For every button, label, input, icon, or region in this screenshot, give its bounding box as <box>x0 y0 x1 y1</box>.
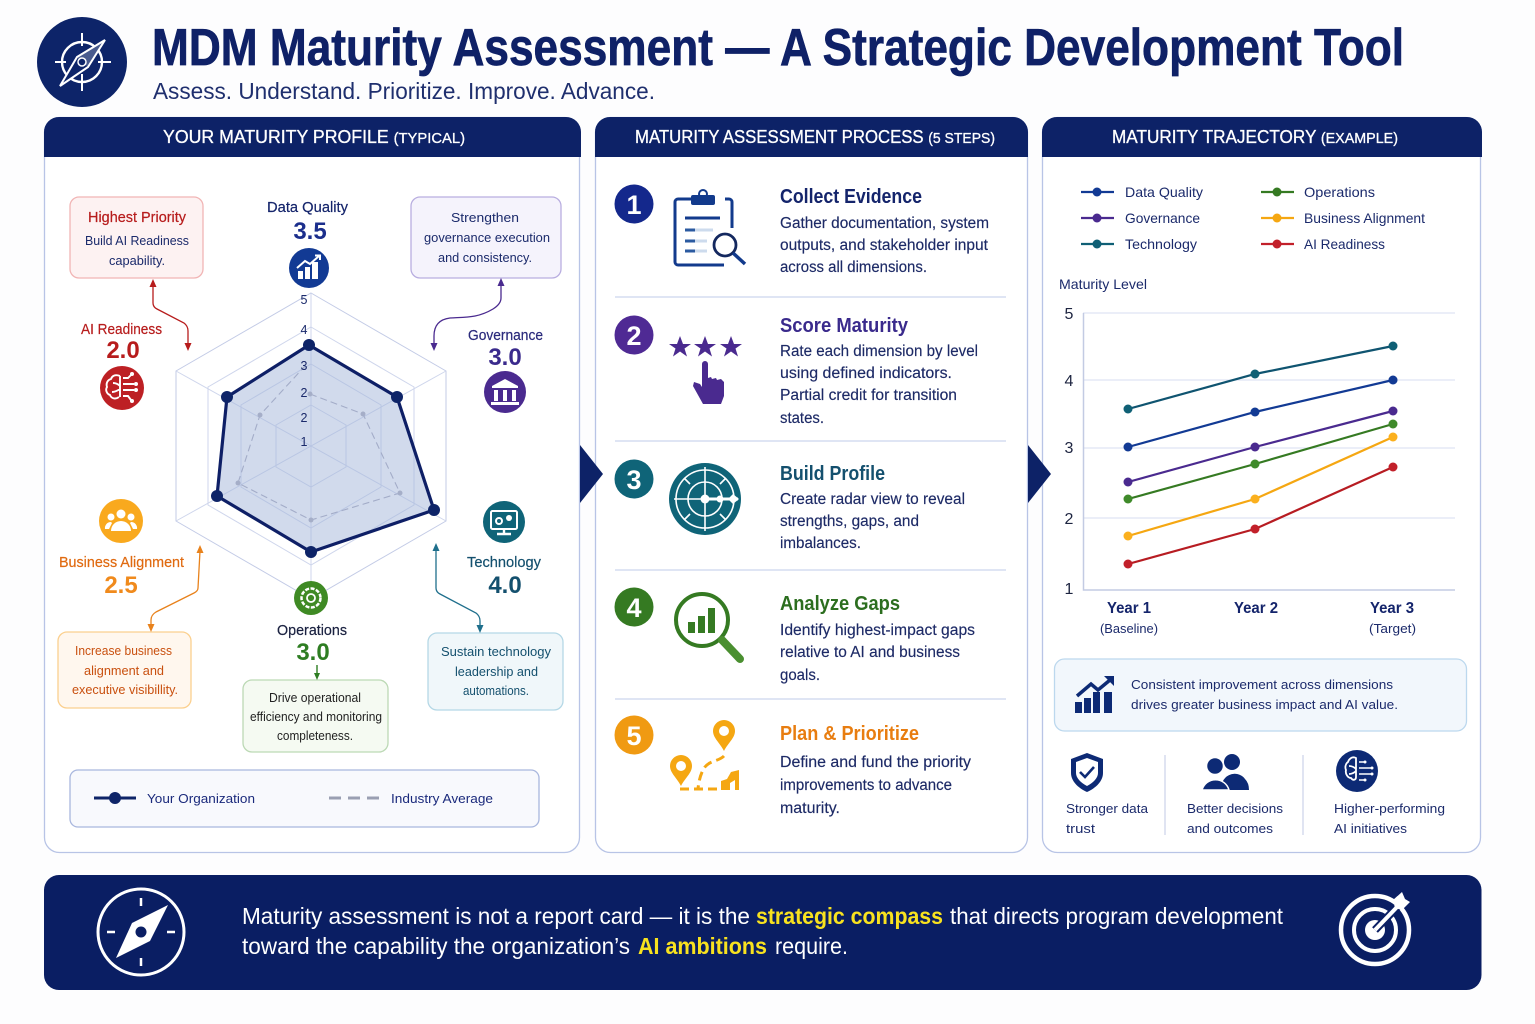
step 5: plan and prioritize: maturity. <box>780 800 840 817</box>
panel heading: trajectory: MATURITY TRAJECTORY (EXAMPLE) <box>1112 127 1398 147</box>
panel: assessment process <box>595 117 1028 852</box>
callout: operations: efficiency and monitoring <box>250 709 382 724</box>
panel: maturity trajectory <box>1042 117 1482 852</box>
callout: operations <box>243 680 388 752</box>
dimension: ai readiness: AI Readiness <box>81 321 162 338</box>
dimension: business alignment: 2.5 <box>104 572 138 599</box>
arrow: ai readiness callout <box>150 279 192 351</box>
panel: your maturity profile <box>44 117 581 852</box>
callout: highest priority <box>70 197 203 278</box>
dimension: technology: 4.0 <box>488 572 522 599</box>
dimension: governance <box>468 327 543 413</box>
callout: technology: leadership and <box>455 664 538 679</box>
callout: technology: Sustain technology <box>441 644 551 659</box>
step 2: score maturity: states. <box>780 410 824 427</box>
dimension: governance: Governance <box>468 327 543 344</box>
line chart: 4 <box>1065 373 1074 390</box>
callout: strengthen governance <box>411 197 561 278</box>
callout: consistent improvement: drives greater business impact and AI value. <box>1131 697 1398 712</box>
subtitle: Assess. Understand. Prioritize. Improve. Advance. <box>153 78 655 104</box>
line chart <box>1065 306 1455 636</box>
step 3: build profile <box>614 460 965 552</box>
benefit: stronger data trust <box>1066 753 1149 836</box>
callout: business alignment: executive visibillity. <box>72 682 178 697</box>
banner text: toward the capability the organization’s <box>242 933 630 959</box>
dimension: data quality: Data Quality <box>267 199 348 216</box>
radar legend: Your Organization <box>147 791 255 806</box>
radar chart: 3 <box>301 359 308 373</box>
line chart: 3 <box>1065 440 1074 457</box>
step 4: analyze gaps: Identify highest-impact gaps <box>780 622 975 639</box>
dimension: data quality <box>267 199 348 288</box>
step 2: score maturity: using defined indicators. <box>780 365 952 382</box>
step 3: build profile: Build Profile <box>780 463 885 485</box>
chart legend: AI Readiness <box>1304 236 1385 252</box>
callout: strengthen governance: and consistency. <box>438 250 532 265</box>
callout: technology: automations. <box>463 683 529 698</box>
arrow: process to trajectory <box>1028 445 1051 503</box>
icon: target <box>1341 892 1410 964</box>
icon: route pins <box>670 720 739 790</box>
step 4: analyze gaps: relative to AI and business <box>780 644 960 661</box>
line chart: Year 3 <box>1370 600 1414 617</box>
callout: highest priority: capability. <box>109 253 165 268</box>
radar legend: Industry Average <box>391 791 493 806</box>
icon: shield <box>1071 753 1103 792</box>
step 3: build profile: strengths, gaps, and <box>780 513 919 530</box>
icon: compass <box>98 889 184 975</box>
chart legend: Business Alignment <box>1304 210 1425 226</box>
dimension: business alignment: Business Alignment <box>59 554 185 571</box>
step 2: score maturity: 2 <box>626 321 642 351</box>
panel heading: process: MATURITY ASSESSMENT PROCESS (5 STEPS) <box>635 127 995 147</box>
line chart: Year 2 <box>1234 600 1278 617</box>
step 1: collect evidence <box>614 184 989 276</box>
arrow: technology callout <box>432 543 484 633</box>
panel header: trajectory <box>1042 117 1482 157</box>
radar chart: 4 <box>301 323 308 337</box>
step 2: score maturity: Score Maturity <box>780 315 909 337</box>
benefit: better decisions: Better decisions <box>1187 801 1284 816</box>
step 2: score maturity: Rate each dimension by level <box>780 343 978 360</box>
banner text <box>242 903 1284 959</box>
banner: strategic compass message <box>44 875 1482 990</box>
step 1: collect evidence: Gather documentation, system <box>780 215 989 232</box>
icon: people <box>1202 754 1249 790</box>
dimension: business alignment <box>59 499 185 599</box>
step 4: analyze gaps: 4 <box>626 593 642 623</box>
arrow: profile to process <box>580 445 603 503</box>
banner text: AI ambitions <box>638 933 767 959</box>
benefit: stronger data trust: Stronger data <box>1066 801 1149 816</box>
step 4: analyze gaps: goals. <box>780 667 820 684</box>
step 2: score maturity: Partial credit for transition <box>780 387 957 404</box>
step 5: plan and prioritize <box>614 716 971 817</box>
benefit: better decisions: and outcomes <box>1187 821 1274 836</box>
radar chart: 2 <box>301 386 308 400</box>
benefit: higher-performing ai: Higher-performing <box>1334 801 1445 816</box>
banner text: Maturity assessment is not a report card — it is the <box>242 903 750 929</box>
dimension: technology <box>467 501 541 599</box>
icon: radar <box>669 463 741 535</box>
line chart: Year 1 <box>1107 600 1151 617</box>
step 3: build profile: 3 <box>626 465 642 495</box>
icon: ai chip brain <box>1336 750 1378 792</box>
callout: highest priority: Highest Priority <box>88 210 187 226</box>
callout: business alignment <box>58 632 191 708</box>
step 1: collect evidence: outputs, and stakeholder input <box>780 237 989 254</box>
dimension: ai readiness: 2.0 <box>106 337 140 364</box>
step 3: build profile: Create radar view to reveal <box>780 491 965 508</box>
callout: operations: Drive operational <box>269 690 361 705</box>
step 3: build profile: imbalances. <box>780 535 861 552</box>
step 5: plan and prioritize: Define and fund the priority <box>780 754 971 771</box>
chart legend: Operations <box>1304 184 1375 200</box>
step 2: score maturity <box>614 315 978 427</box>
radar chart: 5 <box>301 293 308 307</box>
benefit: higher-performing ai: AI initiatives <box>1334 821 1408 836</box>
header logo: compass <box>37 17 127 107</box>
chart legend: Governance <box>1125 210 1200 226</box>
radar legend <box>70 770 539 827</box>
radar chart: 1 <box>301 435 308 449</box>
panel heading: profile: YOUR MATURITY PROFILE (TYPICAL) <box>163 127 465 147</box>
banner text: that directs program development <box>950 903 1284 929</box>
callout: strengthen governance: Strengthen <box>451 210 519 225</box>
step 1: collect evidence: Collect Evidence <box>780 186 922 208</box>
dimension: operations: Operations <box>277 622 347 639</box>
benefit: higher-performing ai <box>1334 750 1445 836</box>
callout: strengthen governance: governance execution <box>424 230 550 245</box>
step 4: analyze gaps: Analyze Gaps <box>780 593 900 615</box>
panel header: profile <box>44 117 581 157</box>
icon: stars and hand <box>669 336 742 404</box>
callout: operations: completeness. <box>277 728 353 743</box>
step 5: plan and prioritize: Plan & Prioritize <box>780 723 919 745</box>
dimension: data quality: 3.5 <box>293 218 327 245</box>
chart legend: Technology <box>1125 236 1197 252</box>
arrow: operations callout <box>314 665 320 680</box>
benefit: better decisions <box>1187 754 1284 836</box>
benefit: stronger data trust: trust <box>1066 821 1095 836</box>
radar chart <box>176 293 446 599</box>
callout: business alignment: Increase business <box>75 643 172 658</box>
line chart: (Baseline) <box>1100 621 1158 636</box>
callout: consistent improvement <box>1054 659 1466 731</box>
step 1: collect evidence: across all dimensions. <box>780 259 927 276</box>
dimension: governance: 3.0 <box>488 344 522 371</box>
callout: business alignment: alignment and <box>84 663 164 678</box>
panel header: process <box>595 117 1028 157</box>
callout: consistent improvement: Consistent improvement across dimensions <box>1131 677 1394 692</box>
icon: growth chart <box>1075 676 1114 713</box>
step 5: plan and prioritize: 5 <box>626 721 642 751</box>
banner text: require. <box>775 933 848 959</box>
arrow: governance callout <box>430 278 504 351</box>
dimension: ai readiness <box>81 321 162 410</box>
callout: technology <box>428 633 563 710</box>
step 1: collect evidence: 1 <box>626 190 642 220</box>
y axis title: Maturity Level <box>1059 276 1147 292</box>
line chart: 2 <box>1065 511 1074 528</box>
callout: highest priority: Build AI Readiness <box>85 233 189 248</box>
banner text: strategic compass <box>756 903 943 929</box>
icon: magnifier with bars <box>676 594 740 659</box>
chart legend: Data Quality <box>1125 184 1203 200</box>
dimension: technology: Technology <box>467 554 541 571</box>
chart legend <box>1081 184 1425 252</box>
line chart: (Target) <box>1369 621 1416 636</box>
step 4: analyze gaps <box>614 588 975 684</box>
line chart: 5 <box>1065 306 1074 323</box>
dimension: operations: 3.0 <box>296 639 330 666</box>
line chart: 1 <box>1065 581 1074 598</box>
dimension: operations <box>277 581 347 666</box>
radar chart: 2 <box>301 411 308 425</box>
arrow: business alignment callout <box>148 545 204 632</box>
icon: clipboard <box>675 190 745 265</box>
step 5: plan and prioritize: improvements to advance <box>780 777 952 794</box>
